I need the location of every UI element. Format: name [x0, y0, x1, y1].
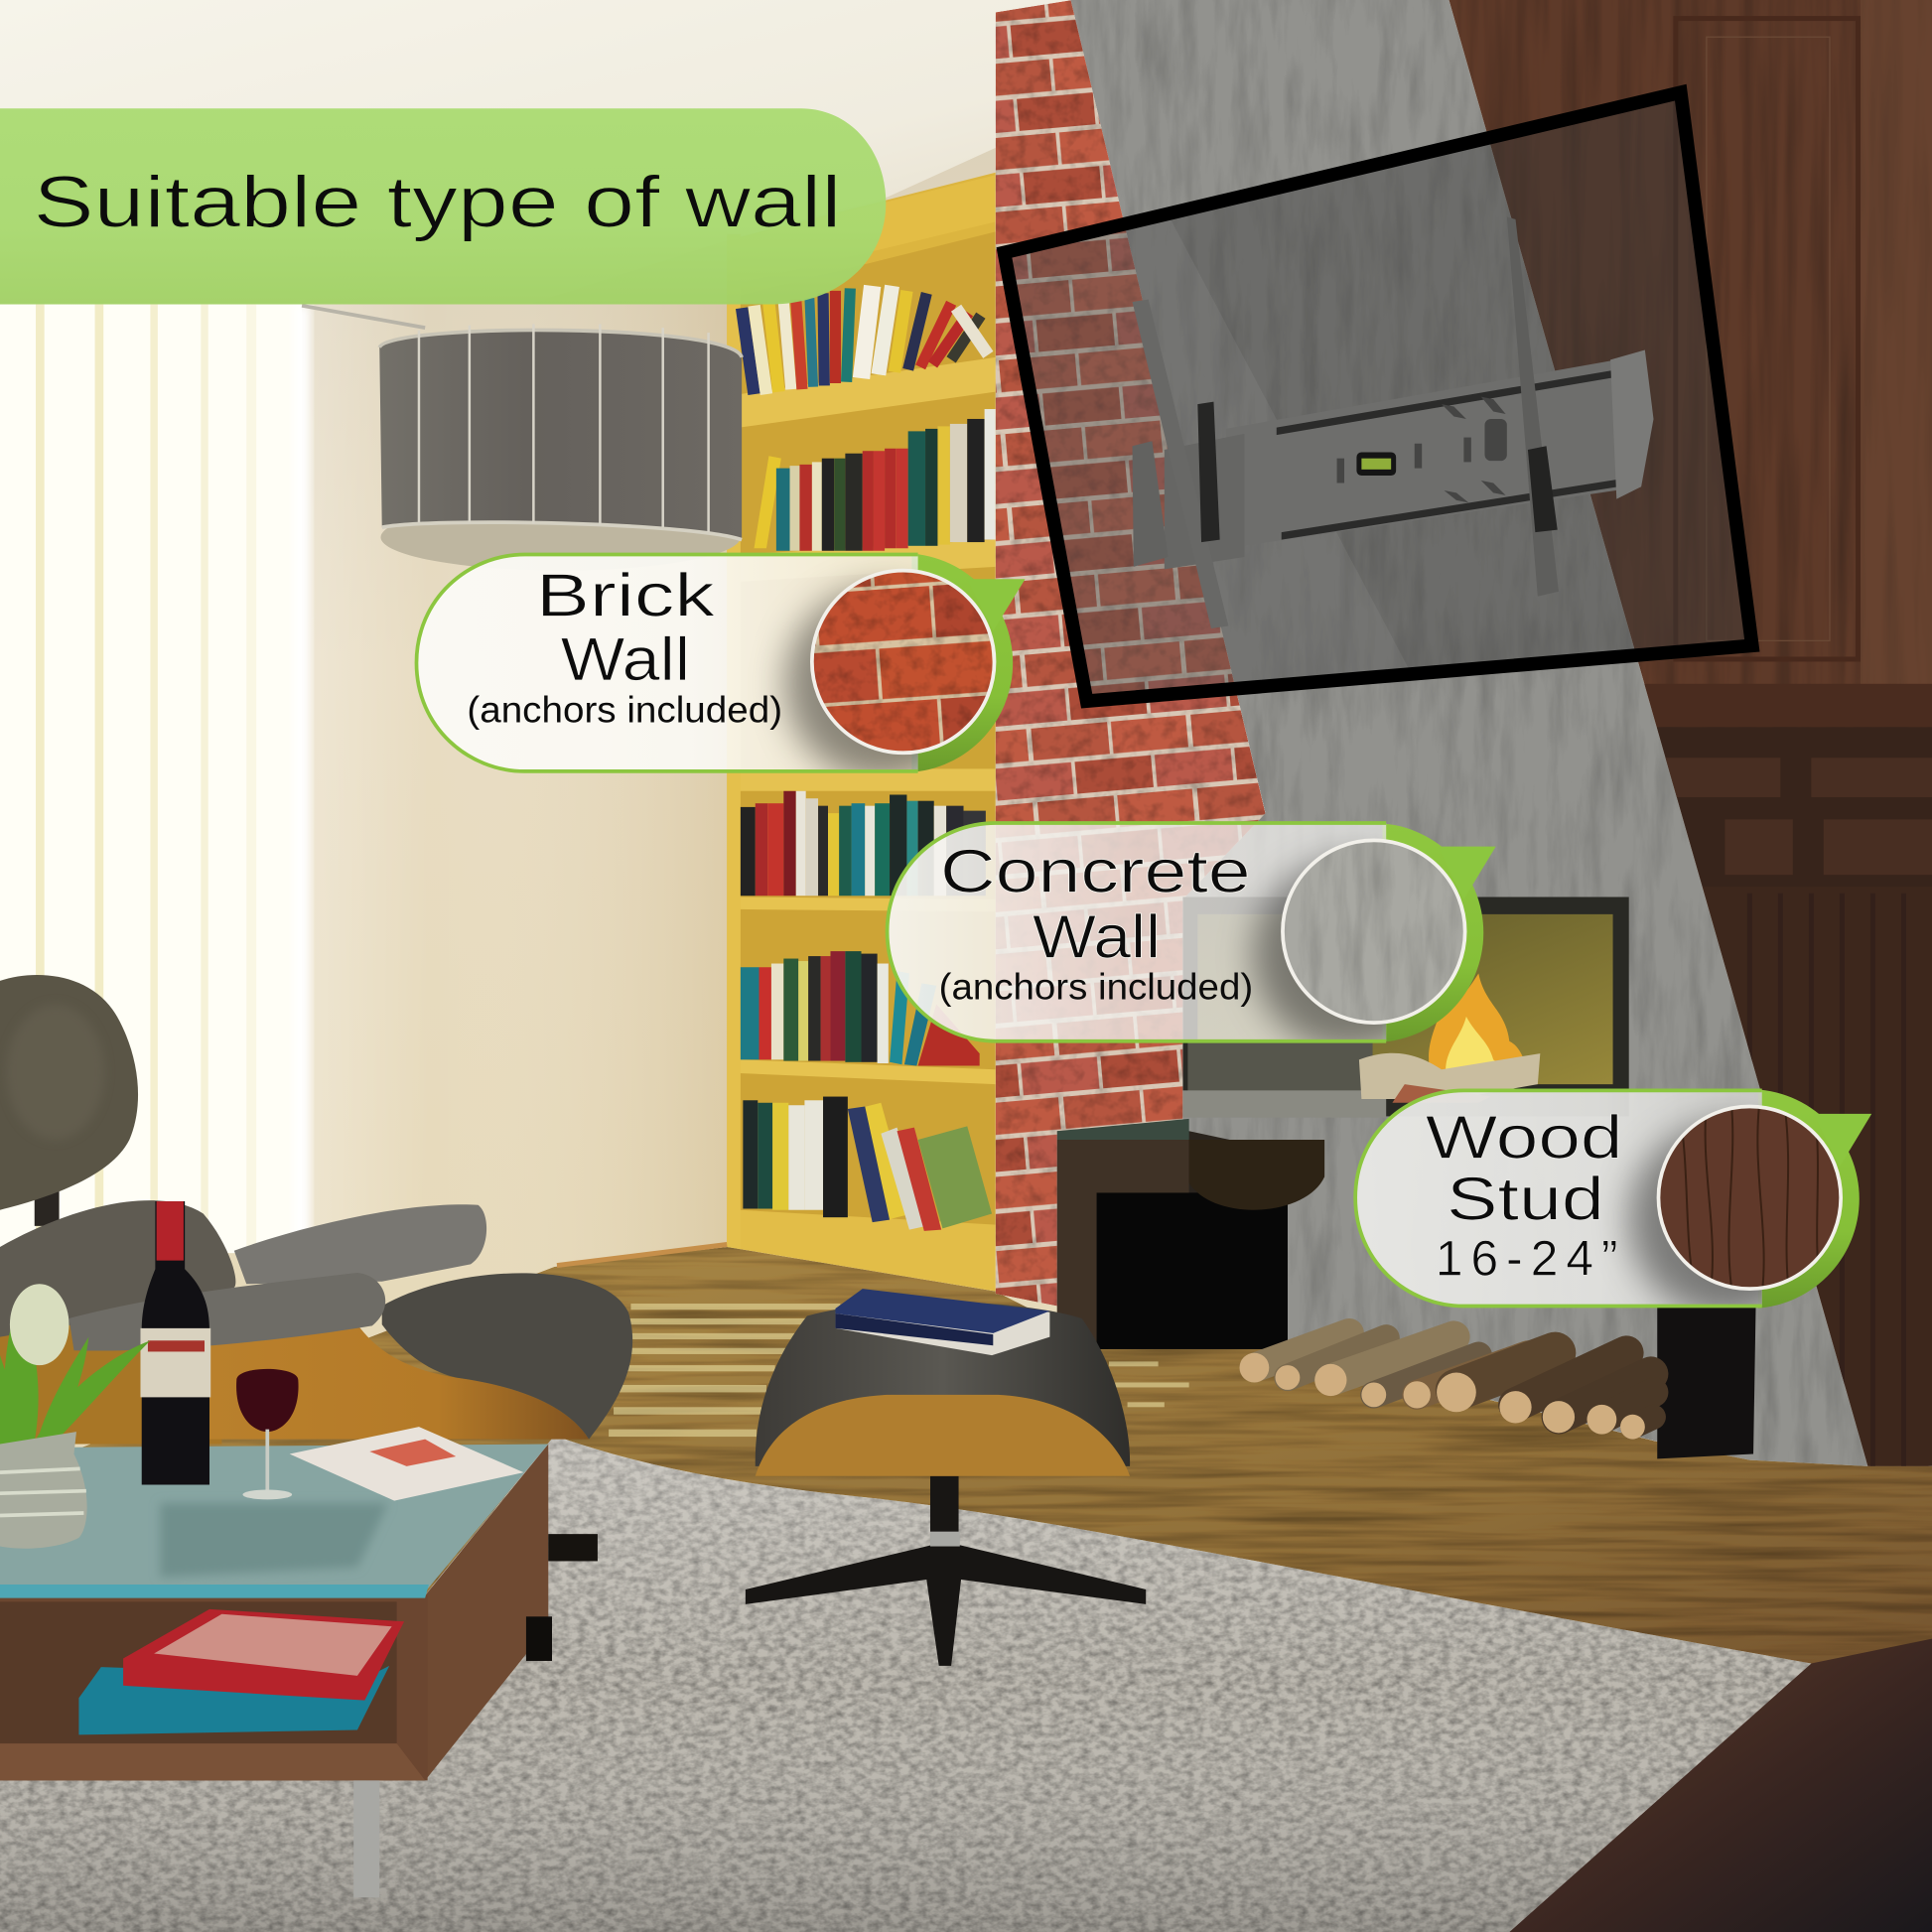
ceiling lamp [302, 306, 742, 571]
wood panelled wall section [1442, 0, 1932, 1466]
book: white on table [290, 1427, 523, 1501]
callout text: Wall [561, 625, 690, 693]
chair wood shell [209, 1315, 589, 1440]
wine glass [236, 1369, 299, 1499]
black TV outline [1004, 92, 1752, 701]
window curtains [0, 305, 311, 1266]
floor baseboard [557, 1244, 727, 1266]
bracket wall plate [1165, 359, 1641, 569]
callout pill [886, 821, 1386, 1043]
ottoman cushion [756, 1302, 1130, 1466]
ottoman swivel stem [930, 1476, 959, 1550]
bracket right arm [1507, 216, 1559, 597]
callout text: Concrete [940, 838, 1251, 905]
books: second row [755, 409, 996, 551]
callout text: (anchors included) [467, 688, 782, 730]
translucent TV frame overlay [1004, 92, 1752, 701]
dark floor corner [1503, 1639, 1932, 1932]
ottoman [746, 1289, 1146, 1666]
bookshelf [727, 173, 996, 1292]
callout text: Brick [536, 562, 716, 629]
books: fourth row [741, 951, 980, 1066]
callout green tab and pointer [1382, 824, 1495, 1042]
fireplace logs [1359, 1053, 1540, 1103]
book: teal [78, 1666, 389, 1734]
heading: Suitable type of wall [34, 161, 842, 242]
black speaker block [1657, 1307, 1756, 1458]
background: living room wall and ceiling [0, 0, 1109, 1478]
wood floor [0, 1244, 1932, 1932]
book: red stress [123, 1609, 404, 1701]
brick wall section [996, 0, 1266, 1307]
ottoman star base [746, 1532, 1146, 1666]
callout text: (anchors included) [939, 966, 1253, 1008]
bracket left ear [1133, 441, 1169, 567]
icon: concrete swatch [1283, 840, 1465, 1023]
table glass top [0, 1445, 548, 1591]
book: navy on ottoman [835, 1289, 1049, 1355]
callout text: Wood [1426, 1104, 1622, 1172]
fireplace [1182, 897, 1629, 1118]
chair seat cushion [382, 1273, 632, 1440]
icon: brick swatch [812, 571, 995, 753]
chair back cushion [0, 1200, 235, 1337]
books: fifth row [743, 1097, 992, 1231]
concrete wall section [1070, 0, 1867, 1466]
table leg [353, 1780, 379, 1897]
lounge chair [0, 975, 632, 1445]
bracket right ear [1610, 349, 1654, 499]
glass console [1057, 1119, 1324, 1349]
chair rear armrest [234, 1204, 486, 1284]
callout pill [415, 552, 918, 773]
banner [0, 108, 886, 305]
chair strut [35, 1189, 60, 1226]
table side panel [425, 1445, 548, 1780]
shag rug [0, 1436, 1811, 1932]
chair left wood shell [0, 1257, 221, 1445]
callout pill [1353, 1088, 1762, 1309]
books: third row [741, 791, 986, 896]
fire flames [1429, 973, 1528, 1084]
callout text: Stud [1447, 1166, 1604, 1233]
callout green tab and pointer [1758, 1090, 1872, 1309]
books: top row [742, 286, 988, 394]
callout text [1426, 1104, 1622, 1287]
ottoman wooden shell [756, 1395, 1130, 1476]
bracket left arm [1133, 300, 1228, 628]
callout: wood stud [1355, 1089, 1871, 1315]
callout text [939, 838, 1253, 1008]
coffee table [0, 1201, 598, 1897]
callout text: Wall [1033, 902, 1161, 970]
firewood pile [1240, 1333, 1654, 1440]
icon: wood swatch [1658, 1103, 1841, 1294]
chair headrest [0, 975, 138, 1210]
panel: mounting frame with tilt bracket [1004, 92, 1752, 701]
wine bottle [140, 1201, 210, 1484]
chair casters [548, 1534, 598, 1561]
bubble level [1356, 452, 1396, 476]
callout green tab and pointer [911, 554, 1025, 772]
chair front armrest [69, 1273, 385, 1351]
plant [0, 1284, 150, 1448]
callout text [467, 562, 782, 730]
callout text: 16-24” [1436, 1231, 1618, 1287]
table front frame [0, 1595, 428, 1780]
callout: brick wall [416, 553, 1026, 780]
callout: concrete wall [888, 823, 1496, 1051]
glass vase [0, 1432, 87, 1549]
